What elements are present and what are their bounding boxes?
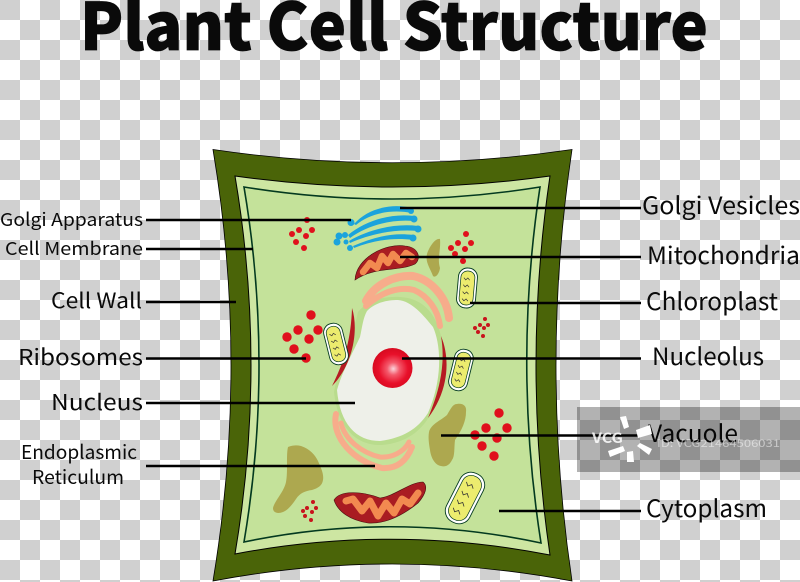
label: Cytoplasm: Cytoplasm — [646, 489, 767, 524]
ribosomes: large left group — [282, 310, 323, 363]
left labels — [0, 206, 143, 490]
label: Endoplasmic Reticulum — [21, 438, 137, 490]
right labels — [642, 186, 800, 524]
label: Vacuole: Vacuole — [648, 414, 738, 449]
label: Nucleus: Nucleus — [51, 385, 143, 417]
chloroplast: top right — [456, 267, 478, 309]
vacuole: lower left — [273, 445, 323, 513]
label: Endoplasmic Reticulum: Endoplasmic — [21, 438, 137, 465]
vacuole: top — [427, 239, 440, 277]
cell wall — [213, 150, 572, 581]
cell membrane outer band — [235, 176, 550, 555]
nucleus — [334, 297, 443, 445]
ribosomes: small right group — [473, 317, 490, 338]
label: Golgi Apparatus: Golgi Apparatus — [0, 206, 143, 232]
label: Nucleolus: Nucleolus — [652, 337, 764, 372]
label: Mitochondria: Mitochondria — [647, 236, 800, 271]
plant cell diagram — [213, 150, 572, 581]
label: Golgi Vesicles: Golgi Vesicles — [642, 186, 800, 221]
ribosomes: large right group — [470, 408, 512, 461]
ribosomes: bottom left group — [301, 500, 318, 522]
watermark — [577, 407, 800, 472]
endoplasmic reticulum: bottom — [335, 414, 412, 468]
mitochondrion: bottom — [334, 482, 426, 523]
watermark icon — [608, 416, 652, 462]
nucleus body — [337, 300, 439, 441]
nucleus halo — [334, 297, 443, 445]
leader lines — [146, 208, 641, 511]
chloroplast: left — [322, 321, 350, 367]
label: Endoplasmic Reticulum: Reticulum — [32, 463, 124, 490]
label: Cell Wall: Cell Wall — [51, 285, 142, 315]
chloroplast: lower right — [441, 468, 489, 528]
ribosomes: top right group — [448, 231, 474, 264]
cytoplasm with membrane line — [244, 187, 541, 543]
mitochondrion: top — [355, 246, 418, 280]
nucleolus — [372, 348, 412, 388]
red crescent right — [428, 336, 447, 418]
vacuole: right — [429, 404, 466, 466]
chloroplast: middle right — [447, 347, 475, 393]
ribosomes: top left group — [289, 217, 315, 251]
watermark text: VCG — [591, 428, 623, 448]
red crescent left — [332, 308, 355, 386]
label: Cell Membrane: Cell Membrane — [5, 235, 143, 261]
golgi apparatus — [334, 206, 422, 251]
watermark: ID: VCG21464506031 — [657, 436, 780, 451]
label: Ribosomes: Ribosomes — [18, 340, 143, 372]
endoplasmic reticulum: top — [366, 276, 449, 326]
label: Chloroplast: Chloroplast — [646, 282, 778, 317]
